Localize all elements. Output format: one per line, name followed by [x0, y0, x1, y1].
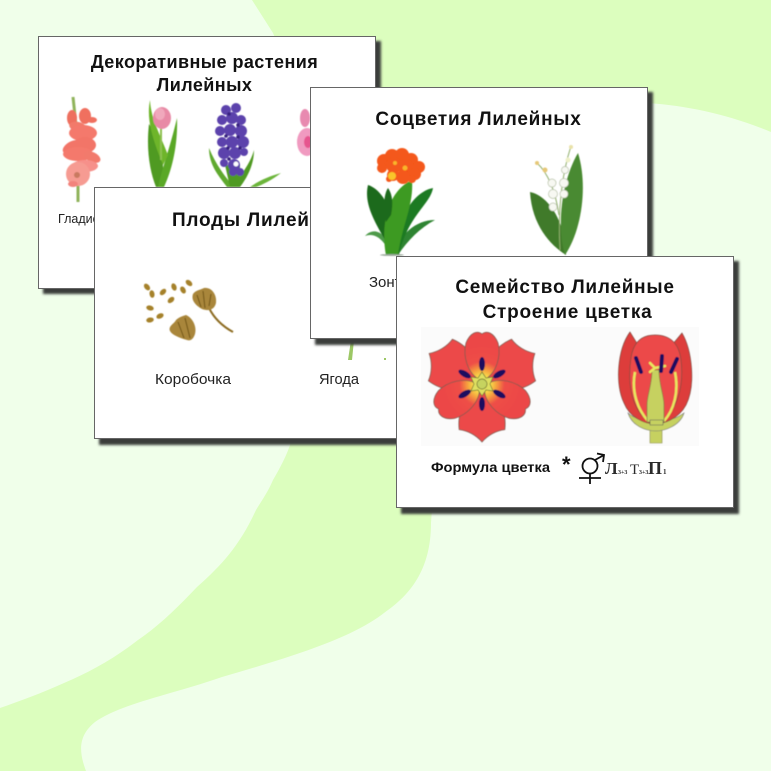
title: decorative plants: Лилейных: [157, 75, 252, 95]
formula label: Формула цветка: [431, 460, 551, 475]
title: flower structure: Семейство Лилейные: [455, 277, 675, 298]
plant: hyacinth: [209, 103, 281, 187]
formula: perianth notation: 1: [663, 468, 667, 476]
card: inflorescences: [310, 88, 653, 345]
card: fruits: [94, 188, 437, 445]
plant: stem fragment: [348, 340, 386, 360]
diagram: flower top view: [417, 332, 547, 442]
label: berry: Ягода: [319, 371, 360, 388]
title: flower structure: Строение цветка: [483, 302, 652, 323]
formula: perianth notation: 3+3: [639, 470, 648, 476]
label: umbel: Зонтик: [369, 274, 417, 291]
plant: clivia: [365, 148, 435, 256]
label: gladiolus: Гладиолус: [58, 212, 119, 226]
card: flower structure: [396, 256, 739, 514]
plant: tulip: [148, 100, 177, 187]
formula: perianth notation: П: [648, 458, 662, 478]
illustration: capsules and seeds: [143, 279, 233, 340]
image background: [421, 327, 699, 446]
plant: lily of the valley: [530, 145, 583, 255]
title: decorative plants: Декоративные растения: [91, 52, 318, 72]
formula: asterisk: *: [562, 452, 571, 477]
card: decorative plants: [38, 36, 381, 294]
title: fruits: Плоды Лилейных: [172, 210, 350, 231]
formula: perianth notation: Л: [605, 459, 618, 478]
plant: pink lily: [297, 109, 317, 156]
formula: perianth notation: 3+3: [618, 470, 627, 476]
plant: gladiolus: [60, 97, 102, 202]
formula: perianth notation: Т: [630, 462, 639, 478]
title: inflorescences: Соцветия Лилейных: [375, 109, 582, 130]
diagram: flower section: [618, 332, 692, 443]
formula: sex symbol: [579, 454, 604, 484]
label: capsule: Коробочка: [155, 371, 232, 388]
